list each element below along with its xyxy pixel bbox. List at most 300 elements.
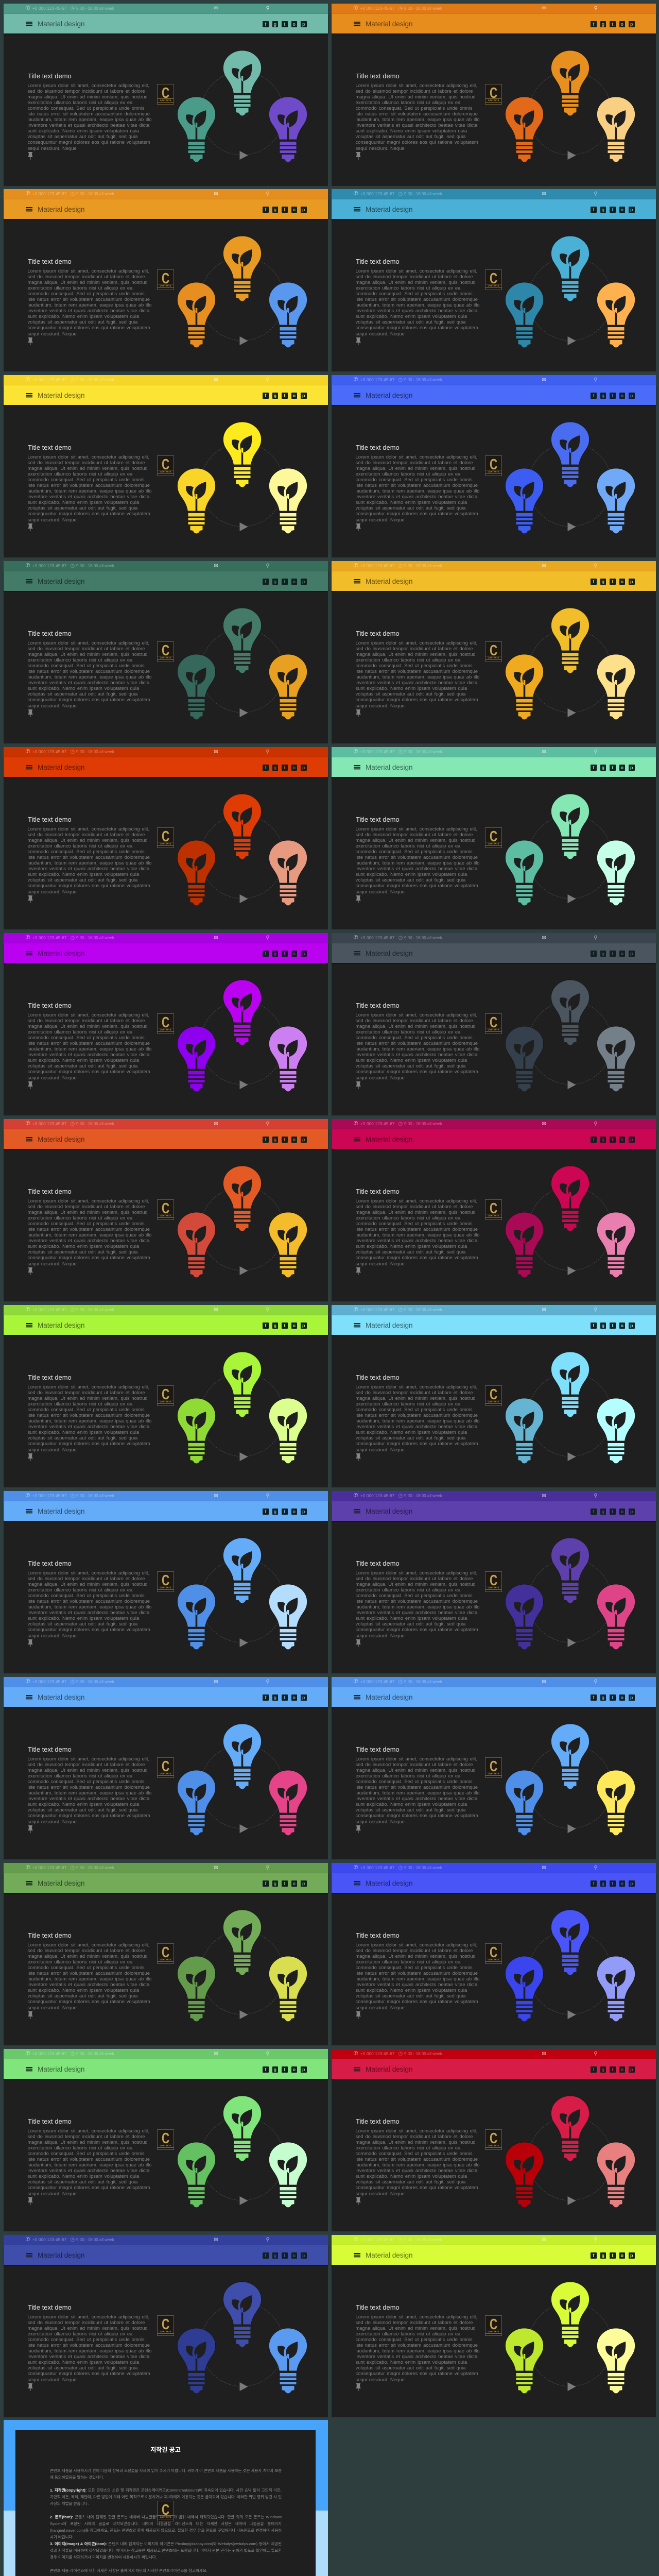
- top bar: ⚲: [594, 749, 598, 755]
- body text: exercitation ullamco laboris nisi ut aliquip ex ea: [355, 285, 460, 291]
- body text: sequi nesciunt. Neque: [28, 145, 77, 151]
- header: Material design: [38, 392, 85, 399]
- top bar: ◷: [398, 749, 403, 755]
- header: p: [302, 951, 305, 956]
- body text: voluptas sit aspernatur aut odit aut fugit, sed quia: [28, 1063, 137, 1069]
- body text: consequuntur magni dolores eos qui ratione voluptatem: [355, 1626, 478, 1632]
- body text: inventore veritatis et quasi architecto beatae vitae dicta: [355, 2353, 477, 2359]
- badge: C: [490, 85, 497, 101]
- header: t: [284, 1137, 285, 1142]
- body text: exercitation ullamco laboris nisi ut aliquip ex ea: [355, 2145, 460, 2150]
- body text: magna aliqua. Ut enim ad minim veniam, quis nostrud: [28, 94, 148, 99]
- body text: inventore veritatis et quasi architecto beatae vitae dicta: [355, 122, 477, 128]
- body text: iste natus error sit voluptatem accusantium doloremque: [28, 1598, 150, 1604]
- header: p: [302, 22, 305, 27]
- top bar: ✉: [542, 191, 546, 197]
- body text: exercitation ullamco laboris nisi ut aliquip ex ea: [355, 843, 460, 849]
- badge: CONTENTS: [160, 842, 171, 845]
- top bar: 9:00 - 18:00 all week: [76, 1122, 114, 1126]
- top bar: +0 000 123-45-67: [360, 378, 395, 382]
- body text: [355, 640, 480, 708]
- body text: voluptas sit aspernatur aut odit aut fugit, sed quia: [355, 1063, 465, 1069]
- badge: [485, 1013, 502, 1034]
- body text: voluptas sit aspernatur aut odit aut fugit, sed quia: [355, 691, 465, 697]
- body text: commodo consequat. Sed ut perspiciatis unde omnis: [28, 1592, 145, 1598]
- top bar: ✉: [542, 1865, 546, 1871]
- body text: iste natus error sit voluptatem accusantium doloremque: [28, 296, 150, 302]
- body text: Lorem ipsum dolor sit amet, consectetur adipiscing elit,: [28, 1942, 149, 1947]
- header: Material design: [366, 2065, 413, 2073]
- top bar: [3, 561, 327, 571]
- header: g: [274, 951, 276, 956]
- top bar: +0 000 123-45-67: [360, 6, 395, 11]
- badge: C: [490, 1386, 497, 1403]
- top bar: ⚲: [266, 749, 270, 755]
- bulb cycle diagram: [28, 1352, 307, 1463]
- top bar: ⚲: [594, 191, 598, 197]
- body text: sequi nesciunt. Neque: [355, 703, 405, 708]
- panel 5: [3, 375, 327, 557]
- body text: iste natus error sit voluptatem accusantium doloremque: [355, 1784, 478, 1790]
- body text: Lorem ipsum dolor sit amet, consectetur adipiscing elit,: [28, 1756, 149, 1761]
- top bar: ✉: [542, 1679, 546, 1685]
- badge: CONTENTS: [160, 1586, 171, 1589]
- body text: Lorem ipsum dolor sit amet, consectetur adipiscing elit,: [355, 1198, 477, 1204]
- body text: laudantium, totam rem aperiam, eaque ipsa quae ab illo: [355, 488, 480, 494]
- header: t: [612, 1137, 613, 1142]
- top bar: ✉: [214, 2051, 218, 2057]
- header: t: [612, 2253, 613, 2258]
- badge: [485, 269, 502, 290]
- header: p: [630, 2253, 633, 2258]
- panel 7: [3, 561, 327, 743]
- badge: C: [490, 270, 497, 287]
- header: g: [601, 207, 604, 212]
- badge: C: [490, 1014, 497, 1031]
- body text: sed do eiusmod tempor incididunt ut labore et dolore: [355, 832, 473, 837]
- header: p: [302, 207, 305, 212]
- body text: laudantium, totam rem aperiam, eaque ipsa quae ab illo: [28, 116, 151, 122]
- header: o: [292, 579, 296, 584]
- body text: inventore veritatis et quasi architecto beatae vitae dicta: [28, 2353, 149, 2359]
- bulb cycle diagram: [332, 1863, 656, 2045]
- body text: voluptas sit aspernatur aut odit aut fugit, sed quia: [355, 1621, 465, 1626]
- header: p: [630, 951, 633, 956]
- body text: exercitation ullamco laboris nisi ut aliquip ex ea: [355, 1773, 460, 1778]
- header: f: [593, 1323, 594, 1328]
- body text: magna aliqua. Ut enim ad minim veniam, quis nostrud: [355, 651, 476, 657]
- header: t: [612, 765, 613, 770]
- body text: exercitation ullamco laboris nisi ut aliquip ex ea: [355, 657, 460, 663]
- title: Title text demo: [356, 2117, 400, 2125]
- header: g: [274, 1323, 276, 1328]
- body text: exercitation ullamco laboris nisi ut aliquip ex ea: [28, 1773, 132, 1778]
- header: o: [621, 1881, 623, 1886]
- top bar: 9:00 - 18:00 all week: [404, 750, 442, 754]
- body text: sequi nesciunt. Neque: [28, 2005, 77, 2010]
- body text: commodo consequat. Sed ut perspiciatis unde omnis: [355, 1964, 473, 1970]
- body text: iste natus error sit voluptatem accusantium doloremque: [355, 854, 478, 860]
- top bar: ✆: [353, 563, 358, 569]
- body text: consequuntur magni dolores eos qui ratione voluptatem: [28, 2184, 150, 2190]
- body text: iste natus error sit voluptatem accusantium doloremque: [28, 1412, 150, 1418]
- body text: voluptas sit aspernatur aut odit aut fugit, sed quia: [28, 877, 137, 883]
- badge: C: [490, 2130, 497, 2147]
- header: o: [292, 951, 296, 956]
- body text: magna aliqua. Ut enim ad minim veniam, quis nostrud: [355, 2139, 476, 2145]
- top bar: ◷: [398, 1307, 403, 1313]
- panel 23: [3, 2049, 327, 2231]
- top bar: ⚲: [594, 563, 598, 569]
- top bar: ◷: [398, 563, 403, 569]
- body text: [28, 640, 151, 708]
- body text: sunt explicabo. Nemo enim ipsam voluptatem quia: [28, 1429, 139, 1435]
- body text: Lorem ipsum dolor sit amet, consectetur adipiscing elit,: [28, 454, 149, 460]
- body text: Lorem ipsum dolor sit amet, consectetur adipiscing elit,: [355, 1384, 477, 1389]
- panel 20: [332, 1677, 656, 1859]
- top bar: ⚲: [266, 1865, 270, 1871]
- body text: sequi nesciunt. Neque: [355, 1075, 405, 1080]
- body text: sed do eiusmod tempor incididunt ut labore et dolore: [28, 274, 145, 279]
- top bar: ⚲: [594, 2051, 598, 2057]
- header: t: [284, 1695, 285, 1700]
- panel 22: [332, 1863, 656, 2045]
- header: o: [292, 1323, 296, 1328]
- header: Material design: [38, 578, 85, 585]
- badge: C: [162, 1014, 169, 1031]
- body text: inventore veritatis et quasi architecto beatae vitae dicta: [28, 122, 149, 128]
- badge: C: [162, 1758, 169, 1775]
- body text: magna aliqua. Ut enim ad minim veniam, quis nostrud: [355, 2325, 476, 2331]
- top bar: ✆: [353, 749, 358, 755]
- header: p: [302, 2253, 305, 2258]
- body text: inventore veritatis et quasi architecto beatae vitae dicta: [355, 1423, 477, 1429]
- body text: inventore veritatis et quasi architecto beatae vitae dicta: [28, 1238, 149, 1243]
- body text: laudantium, totam rem aperiam, eaque ipsa quae ab illo: [28, 302, 151, 308]
- body text: sed do eiusmod tempor incididunt ut labore et dolore: [355, 1575, 473, 1581]
- top bar: ⚲: [266, 6, 270, 11]
- top bar: ✆: [353, 1307, 358, 1313]
- body text: sequi nesciunt. Neque: [28, 517, 77, 522]
- body text: laudantium, totam rem aperiam, eaque ipsa quae ab illo: [355, 1232, 480, 1238]
- body text: magna aliqua. Ut enim ad minim veniam, quis nostrud: [28, 1767, 148, 1773]
- body text: voluptas sit aspernatur aut odit aut fugit, sed quia: [28, 133, 137, 139]
- body text: voluptas sit aspernatur aut odit aut fugit, sed quia: [28, 1807, 137, 1812]
- body text: voluptas sit aspernatur aut odit aut fugit, sed quia: [355, 505, 465, 511]
- header: t: [612, 951, 613, 956]
- top bar: [3, 1491, 327, 1501]
- body text: Lorem ipsum dolor sit amet, consectetur adipiscing elit,: [355, 1012, 477, 1018]
- top bar: [332, 1863, 656, 1873]
- title: Title text demo: [356, 1188, 400, 1195]
- badge: [485, 827, 502, 848]
- top bar: [332, 2235, 656, 2245]
- body text: Lorem ipsum dolor sit amet, consectetur adipiscing elit,: [355, 1942, 477, 1947]
- header: p: [630, 1695, 633, 1700]
- top bar: +0 000 123-45-67: [32, 1122, 67, 1126]
- top bar: 9:00 - 18:00 all week: [76, 6, 114, 11]
- body text: sequi nesciunt. Neque: [28, 331, 77, 336]
- bulb cycle diagram: [28, 793, 307, 906]
- top bar: ◷: [398, 1679, 403, 1685]
- header: Material design: [366, 20, 413, 28]
- body text: consequuntur magni dolores eos qui ratione voluptatem: [355, 883, 478, 888]
- body text: [28, 454, 151, 522]
- top bar: ⚲: [266, 191, 270, 197]
- body text: sed do eiusmod tempor incididunt ut labore et dolore: [28, 1204, 145, 1209]
- body text: [28, 1198, 151, 1266]
- header: [332, 2059, 656, 2079]
- body text: commodo consequat. Sed ut perspiciatis unde omnis: [28, 1778, 145, 1784]
- panel: copyright notice: [3, 2420, 327, 2576]
- title: Title text demo: [356, 1002, 400, 1009]
- top bar: +0 000 123-45-67: [32, 192, 67, 196]
- top bar: [3, 375, 327, 385]
- body text: sequi nesciunt. Neque: [355, 2005, 405, 2010]
- body text: iste natus error sit voluptatem accusantium doloremque: [28, 2342, 150, 2348]
- top bar: ◷: [398, 6, 403, 11]
- title: Title text demo: [28, 72, 72, 80]
- body text: laudantium, totam rem aperiam, eaque ipsa quae ab illo: [355, 302, 480, 308]
- body text: sequi nesciunt. Neque: [28, 1633, 77, 1638]
- body text: exercitation ullamco laboris nisi ut aliquip ex ea: [355, 1401, 460, 1406]
- top bar: ✉: [214, 1493, 218, 1499]
- body text: voluptas sit aspernatur aut odit aut fugit, sed quia: [355, 1993, 465, 1998]
- header: t: [612, 1881, 613, 1886]
- body text: sequi nesciunt. Neque: [355, 145, 405, 151]
- body text: commodo consequat. Sed ut perspiciatis unde omnis: [28, 2336, 145, 2342]
- body text: commodo consequat. Sed ut perspiciatis unde omnis: [355, 1221, 473, 1226]
- body text: sunt explicabo. Nemo enim ipsam voluptatem quia: [28, 685, 139, 691]
- badge: C: [162, 1572, 169, 1589]
- badge: C: [490, 456, 497, 473]
- body text: consequuntur magni dolores eos qui ratione voluptatem: [355, 139, 478, 145]
- body text: laudantium, totam rem aperiam, eaque ipsa quae ab illo: [28, 1232, 151, 1238]
- top bar: ✉: [214, 377, 218, 383]
- top bar: +0 000 123-45-67: [32, 936, 67, 940]
- body text: Lorem ipsum dolor sit amet, consectetur adipiscing elit,: [355, 826, 477, 832]
- top bar: +0 000 123-45-67: [360, 192, 395, 196]
- header: g: [274, 2253, 276, 2258]
- body text: laudantium, totam rem aperiam, eaque ipsa quae ab illo: [28, 1046, 151, 1052]
- body text: exercitation ullamco laboris nisi ut aliquip ex ea: [28, 1401, 132, 1406]
- body text: commodo consequat. Sed ut perspiciatis unde omnis: [355, 291, 473, 296]
- header: p: [630, 1323, 633, 1328]
- top bar: ✆: [353, 1493, 358, 1499]
- dark notice card: [15, 2430, 316, 2576]
- top bar: 9:00 - 18:00 all week: [76, 750, 114, 754]
- body text: laudantium, totam rem aperiam, eaque ipsa quae ab illo: [355, 116, 480, 122]
- bulb cycle diagram: [28, 1724, 307, 1835]
- body text: laudantium, totam rem aperiam, eaque ipsa quae ab illo: [28, 860, 151, 866]
- body text: [355, 2128, 480, 2196]
- body text: magna aliqua. Ut enim ad minim veniam, quis nostrud: [28, 1209, 148, 1215]
- top bar: [332, 1491, 656, 1501]
- top bar: ✆: [353, 1121, 358, 1127]
- top bar: ✉: [214, 1679, 218, 1685]
- top bar: ✆: [26, 1121, 30, 1127]
- badge: C: [162, 85, 169, 101]
- panel 24: [332, 2049, 656, 2231]
- body text: sunt explicabo. Nemo enim ipsam voluptatem quia: [355, 2173, 467, 2179]
- top bar: ✉: [542, 935, 546, 941]
- top bar: ◷: [398, 935, 403, 941]
- header: [3, 1315, 327, 1335]
- bulb cycle diagram: [356, 980, 635, 1091]
- header: Material design: [38, 764, 85, 771]
- top bar: ⚲: [266, 563, 270, 569]
- top bar: ✆: [353, 377, 358, 383]
- top bar: +0 000 123-45-67: [360, 1122, 395, 1126]
- header: p: [302, 1323, 305, 1328]
- header: Material design: [38, 1321, 85, 1329]
- header: o: [292, 2067, 296, 2072]
- header: g: [601, 2067, 604, 2072]
- header: o: [621, 1695, 623, 1700]
- header: g: [601, 951, 604, 956]
- body text: sequi nesciunt. Neque: [355, 331, 405, 336]
- panel 2: [332, 4, 656, 186]
- top bar: ✉: [214, 1121, 218, 1127]
- body text: commodo consequat. Sed ut perspiciatis unde omnis: [28, 663, 145, 668]
- body text: iste natus error sit voluptatem accusantium doloremque: [355, 1226, 478, 1232]
- body text: magna aliqua. Ut enim ad minim veniam, quis nostrud: [28, 465, 148, 471]
- top bar: 9:00 - 18:00 all week: [404, 6, 442, 11]
- body text: magna aliqua. Ut enim ad minim veniam, quis nostrud: [355, 1023, 476, 1029]
- header: t: [284, 22, 285, 27]
- header: o: [621, 393, 623, 398]
- header: g: [601, 393, 604, 398]
- body text: sequi nesciunt. Neque: [28, 2191, 77, 2196]
- top bar: ⚲: [594, 935, 598, 941]
- badge: CONTENTS: [488, 99, 499, 101]
- top bar: +0 000 123-45-67: [360, 1494, 395, 1498]
- badge: CONTENTS: [160, 1028, 171, 1031]
- body text: iste natus error sit voluptatem accusantium doloremque: [28, 1226, 150, 1232]
- top bar: [332, 2049, 656, 2059]
- body text: sunt explicabo. Nemo enim ipsam voluptatem quia: [28, 2173, 139, 2179]
- body text: exercitation ullamco laboris nisi ut aliquip ex ea: [28, 1029, 132, 1035]
- header: f: [593, 1509, 594, 1514]
- body text: Lorem ipsum dolor sit amet, consectetur adipiscing elit,: [355, 2314, 477, 2319]
- header: p: [630, 2067, 633, 2072]
- header: o: [292, 765, 296, 770]
- header: o: [621, 22, 623, 27]
- top bar: ✉: [214, 563, 218, 569]
- top bar: ✆: [26, 191, 30, 197]
- title: Title text demo: [28, 816, 72, 823]
- badge: CONTENTS: [488, 842, 499, 845]
- top bar: [3, 189, 327, 199]
- badge: CONTENTS: [488, 1958, 499, 1961]
- header: [332, 757, 656, 777]
- badge: [157, 1385, 174, 1406]
- top bar: ◷: [70, 1307, 75, 1313]
- header: [332, 14, 656, 33]
- top bar: ⚲: [594, 6, 598, 11]
- body text: sunt explicabo. Nemo enim ipsam voluptatem quia: [355, 128, 467, 133]
- bulb cycle diagram: [28, 608, 307, 719]
- body text: sequi nesciunt. Neque: [355, 2377, 405, 2382]
- top bar: ✉: [214, 935, 218, 941]
- body text: sed do eiusmod tempor incididunt ut labore et dolore: [28, 1575, 145, 1581]
- header: t: [284, 2253, 285, 2258]
- bulb cycle diagram: [356, 236, 635, 347]
- body text: magna aliqua. Ut enim ad minim veniam, quis nostrud: [28, 2325, 148, 2331]
- top bar: ◷: [398, 191, 403, 197]
- header: f: [593, 2067, 594, 2072]
- top bar: ⚲: [594, 1493, 598, 1499]
- panel 18: [332, 1491, 656, 1673]
- body text: inventore veritatis et quasi architecto beatae vitae dicta: [28, 1795, 149, 1801]
- body text: exercitation ullamco laboris nisi ut aliquip ex ea: [355, 1029, 460, 1035]
- body text: consequuntur magni dolores eos qui ratione voluptatem: [355, 1440, 478, 1446]
- header: g: [274, 765, 276, 770]
- top bar: ◷: [70, 6, 75, 11]
- body text: commodo consequat. Sed ut perspiciatis unde omnis: [355, 105, 473, 111]
- body text: exercitation ullamco laboris nisi ut aliquip ex ea: [355, 1587, 460, 1592]
- body text: sunt explicabo. Nemo enim ipsam voluptatem quia: [28, 313, 139, 319]
- badge: CONTENTS: [488, 656, 499, 659]
- body text: laudantium, totam rem aperiam, eaque ipsa quae ab illo: [28, 1418, 151, 1423]
- body text: sed do eiusmod tempor incididunt ut labore et dolore: [355, 1761, 473, 1767]
- badge: [157, 2501, 174, 2521]
- body text: sunt explicabo. Nemo enim ipsam voluptatem quia: [28, 2359, 139, 2365]
- header: o: [621, 765, 623, 770]
- body text: laudantium, totam rem aperiam, eaque ipsa quae ab illo: [28, 2162, 151, 2167]
- bulb cycle diagram: [28, 421, 307, 534]
- top bar: ✉: [214, 6, 218, 11]
- body text: consequuntur magni dolores eos qui ratione voluptatem: [28, 1998, 150, 2004]
- badge: CONTENTS: [160, 2144, 171, 2147]
- body text: magna aliqua. Ut enim ad minim veniam, quis nostrud: [28, 1023, 148, 1029]
- header: p: [302, 765, 305, 770]
- body text: consequuntur magni dolores eos qui ratione voluptatem: [355, 2370, 478, 2376]
- body text: inventore veritatis et quasi architecto beatae vitae dicta: [355, 866, 477, 871]
- top bar: ⚲: [266, 377, 270, 383]
- top bar: ⚲: [266, 1121, 270, 1127]
- body text: Lorem ipsum dolor sit amet, consectetur adipiscing elit,: [355, 2128, 477, 2133]
- body text: Lorem ipsum dolor sit amet, consectetur adipiscing elit,: [28, 2128, 149, 2133]
- body text: sunt explicabo. Nemo enim ipsam voluptatem quia: [28, 499, 139, 505]
- top bar: ⚲: [594, 1679, 598, 1685]
- header: g: [274, 393, 276, 398]
- body text: sequi nesciunt. Neque: [355, 1261, 405, 1266]
- header: p: [630, 1509, 633, 1514]
- title: Title text demo: [356, 1560, 400, 1567]
- body text: Lorem ipsum dolor sit amet, consectetur adipiscing elit,: [28, 268, 149, 274]
- body text: voluptas sit aspernatur aut odit aut fugit, sed quia: [355, 133, 465, 139]
- title: Title text demo: [28, 1931, 72, 1939]
- top bar: +0 000 123-45-67: [360, 564, 395, 568]
- header: f: [265, 1137, 266, 1142]
- top bar: +0 000 123-45-67: [360, 2238, 395, 2242]
- body text: laudantium, totam rem aperiam, eaque ipsa quae ab illo: [355, 2162, 480, 2167]
- top bar: [332, 561, 656, 571]
- top bar: ✆: [353, 1865, 358, 1871]
- body text: iste natus error sit voluptatem accusantium doloremque: [355, 1040, 478, 1046]
- body text: iste natus error sit voluptatem accusantium doloremque: [28, 2156, 150, 2162]
- top bar: [332, 933, 656, 943]
- title: Title text demo: [28, 1560, 72, 1567]
- badge: CONTENTS: [160, 2330, 171, 2333]
- top bar: 9:00 - 18:00 all week: [404, 1308, 442, 1312]
- bulb cycle diagram: [356, 1352, 635, 1463]
- header: p: [302, 393, 305, 398]
- header: g: [601, 1509, 604, 1514]
- body text: iste natus error sit voluptatem accusantium doloremque: [28, 111, 150, 116]
- body text: exercitation ullamco laboris nisi ut aliquip ex ea: [28, 471, 132, 477]
